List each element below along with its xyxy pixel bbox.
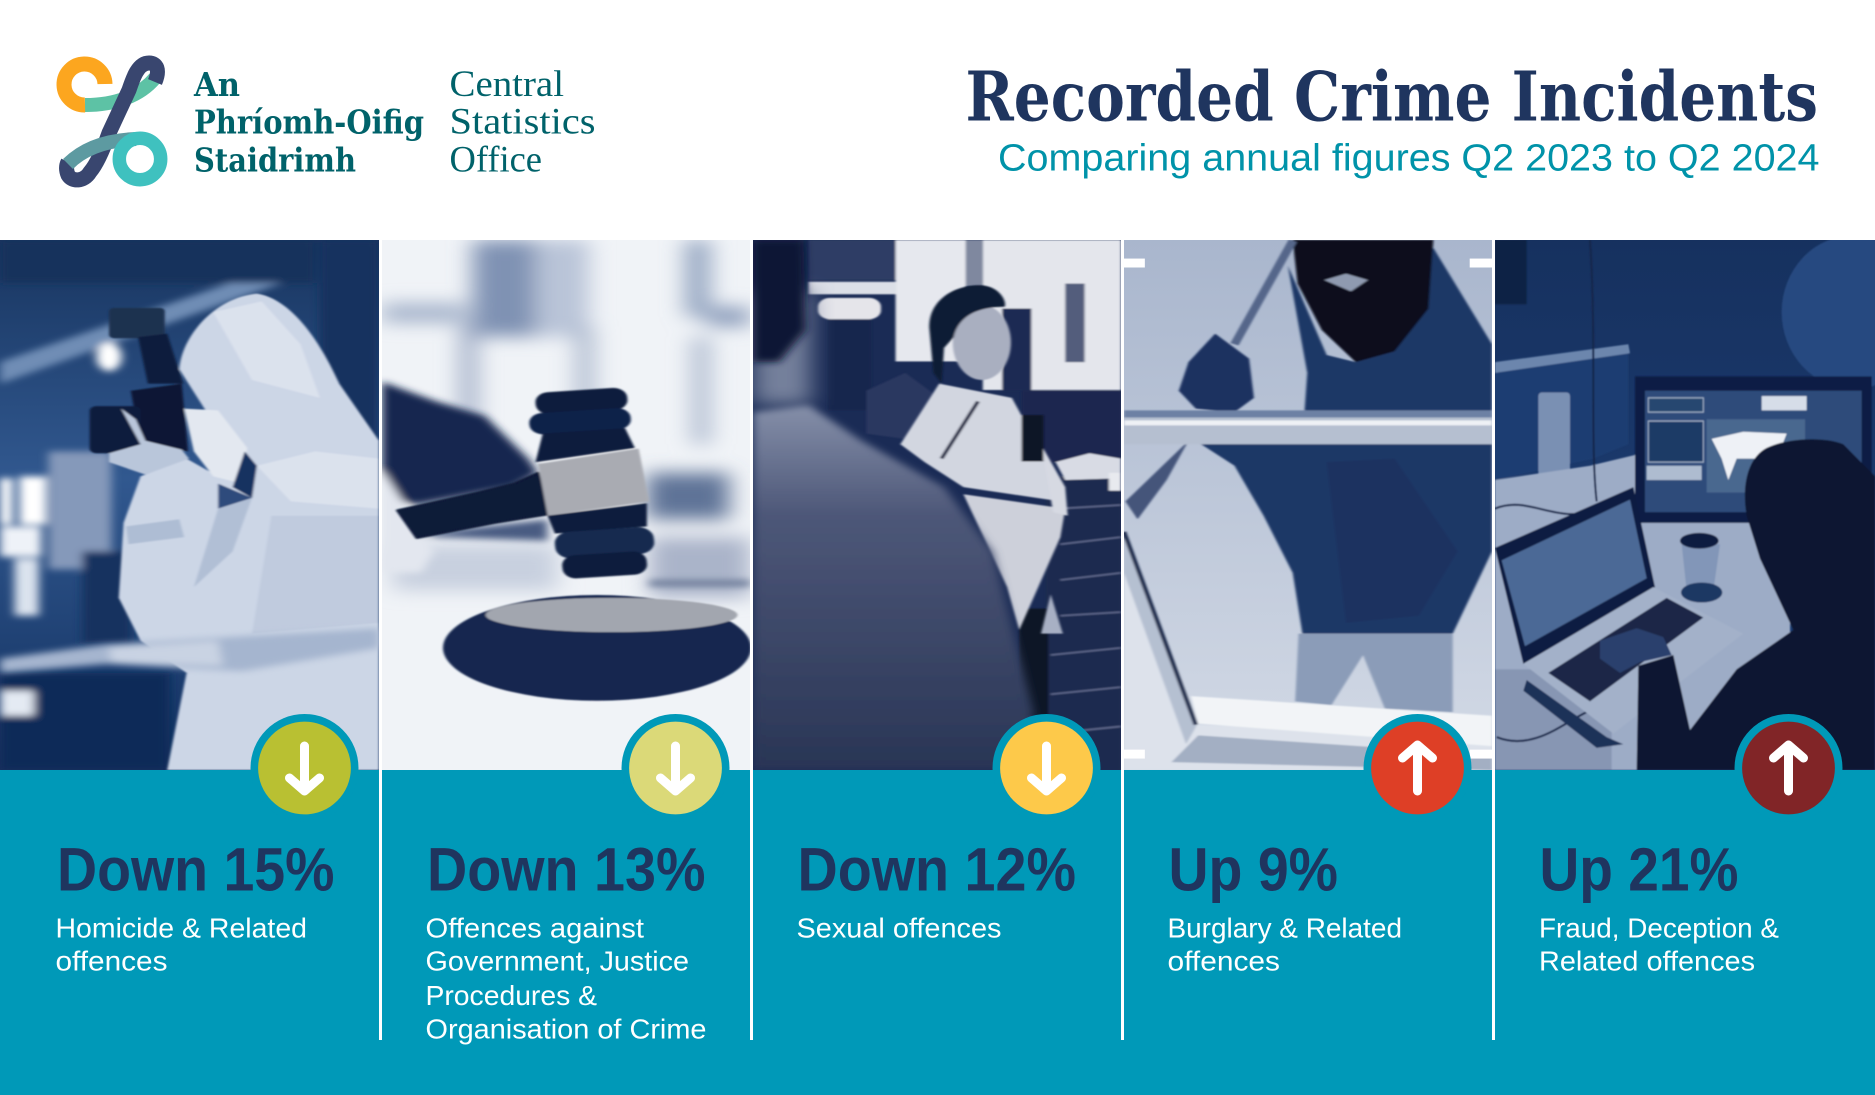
icon: up arrow, dark red bbox=[1734, 714, 1842, 822]
stat: up 9%: Up 9% bbox=[1168, 836, 1338, 905]
description: fraud: Fraud, Deception & bbox=[1539, 912, 1779, 943]
description: homicide: Homicide & Related bbox=[56, 912, 307, 943]
icon: down arrow, olive bbox=[250, 714, 358, 822]
icon: down arrow, pale olive bbox=[622, 714, 730, 822]
description: government and justice: Offences against bbox=[426, 912, 644, 943]
logo text: English name bbox=[450, 64, 596, 180]
photo: masked burglar at window bbox=[1124, 240, 1492, 770]
header bbox=[64, 58, 1820, 180]
logo text: English name: Statistics bbox=[450, 101, 596, 142]
logo text: Irish name bbox=[193, 65, 424, 179]
logo text: English name: Central bbox=[450, 64, 564, 105]
description: burglary: Burglary & Related bbox=[1168, 912, 1402, 943]
logo text: Irish name: An bbox=[193, 65, 240, 104]
description: sexual offences: Sexual offences bbox=[796, 912, 1002, 943]
stat: down 15%: Down 15% bbox=[57, 836, 334, 905]
photo: judge's gavel bbox=[382, 240, 750, 770]
logo text: English name: Office bbox=[450, 139, 542, 180]
panel: homicide bbox=[56, 714, 358, 977]
description: homicide bbox=[56, 912, 307, 977]
icon: down arrow, yellow bbox=[992, 714, 1100, 822]
panel: burglary bbox=[1168, 714, 1472, 977]
description: fraud: Related offences bbox=[1539, 946, 1755, 977]
description: government and justice: Government, Justice bbox=[426, 946, 689, 977]
stat: down 12%: Down 12% bbox=[798, 836, 1076, 905]
panel: offences against government bbox=[426, 714, 730, 1044]
logo: Central Statistics Office bbox=[64, 63, 596, 180]
description: burglary bbox=[1168, 912, 1402, 977]
photo: forensic photographer bbox=[0, 240, 379, 770]
icon: up arrow, red bbox=[1364, 714, 1472, 822]
icon: CSO knot mark bbox=[64, 63, 161, 180]
description: government and justice: Procedures & bbox=[426, 980, 597, 1011]
description: burglary: offences bbox=[1168, 946, 1280, 977]
description: homicide: offences bbox=[56, 946, 168, 977]
photo: woman being followed bbox=[753, 240, 1121, 770]
stat: down 13%: Down 13% bbox=[427, 836, 706, 905]
panel: sexual offences bbox=[796, 714, 1100, 943]
photo: hacker at computers bbox=[1495, 240, 1875, 770]
logo text: Irish name: Staidrimh bbox=[194, 140, 356, 179]
panel: fraud bbox=[1539, 714, 1842, 977]
description: government and justice bbox=[426, 912, 706, 1044]
description: government and justice: Organisation of Crime bbox=[426, 1013, 706, 1044]
teal statistics band bbox=[0, 770, 1875, 1095]
logo text: Irish name: Phríomh-Oifig bbox=[194, 102, 424, 141]
subtitle: Comparing annual figures Q2 2023 to Q2 2024 bbox=[998, 138, 1820, 180]
stat: up 21%: Up 21% bbox=[1540, 836, 1738, 905]
column dividers bbox=[379, 240, 1495, 1040]
description: fraud bbox=[1539, 912, 1779, 977]
